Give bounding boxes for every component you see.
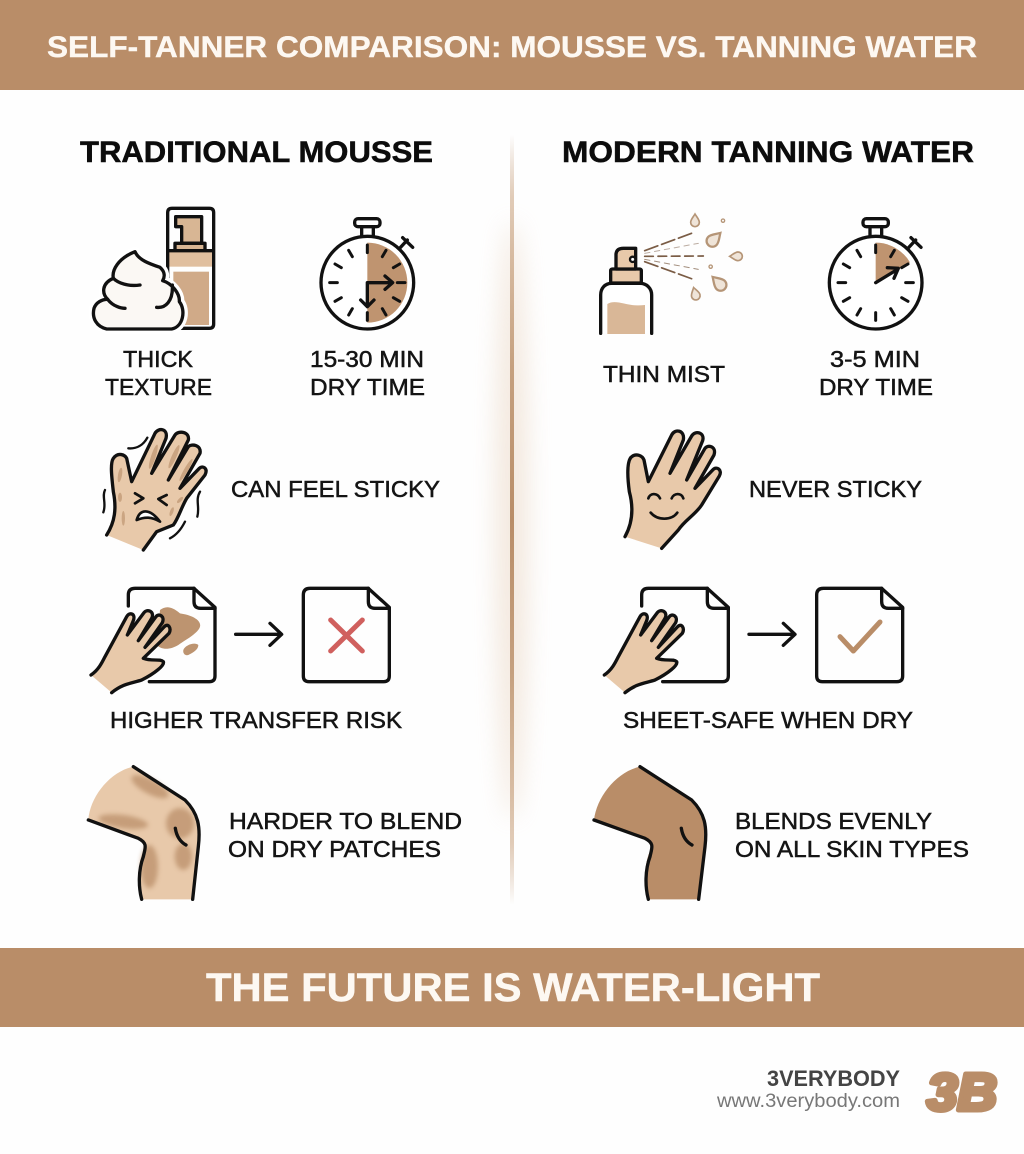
label: harder to blend on dry patches: ON DRY PATCHES bbox=[228, 836, 441, 862]
website: www.3verybody.com bbox=[716, 1091, 900, 1112]
header banner bbox=[0, 0, 1024, 90]
icon: happy hand bbox=[625, 431, 720, 548]
label: dry time 3-5 min bbox=[819, 346, 933, 400]
icon: sheet stays clean with check bbox=[604, 588, 903, 693]
label: never sticky: NEVER STICKY bbox=[749, 476, 922, 502]
label: dry time 15-30 min: 15-30 MIN bbox=[310, 346, 424, 372]
label: thick texture: TEXTURE bbox=[105, 374, 212, 400]
heading: traditional mousse: TRADITIONAL MOUSSE bbox=[80, 136, 433, 169]
label: higher transfer risk: HIGHER TRANSFER RISK bbox=[110, 707, 403, 733]
banner text: THE FUTURE IS WATER-LIGHT bbox=[206, 966, 820, 1010]
bottom banner bbox=[0, 948, 1024, 1027]
label: dry time 3-5 min: 3-5 MIN bbox=[830, 346, 920, 372]
label: thin mist: THIN MIST bbox=[603, 361, 725, 387]
icon: stopwatch 15-30 min bbox=[321, 219, 414, 329]
panel: modern tanning water bbox=[562, 136, 974, 899]
panel: traditional mousse bbox=[80, 136, 462, 899]
logo mark: 3B bbox=[927, 1064, 997, 1122]
icon: knee with even tan bbox=[594, 767, 706, 899]
label: blends evenly on all skin types: ON ALL SKIN TYPES bbox=[735, 836, 969, 862]
label: can feel sticky: CAN FEEL STICKY bbox=[231, 476, 440, 502]
label: harder to blend on dry patches: HARDER TO BLEND bbox=[229, 808, 462, 834]
icon: transfer onto sheet with x bbox=[91, 588, 389, 693]
label: harder to blend on dry patches bbox=[228, 808, 462, 862]
label: dry time 15-30 min: DRY TIME bbox=[310, 374, 425, 400]
heading: modern tanning water: MODERN TANNING WATER bbox=[562, 136, 974, 169]
label: blends evenly on all skin types bbox=[735, 808, 969, 862]
label: dry time 3-5 min: DRY TIME bbox=[819, 374, 933, 400]
label: dry time 15-30 min bbox=[310, 346, 425, 400]
icon: knee with patchy tan bbox=[88, 767, 199, 899]
icon: sticky hand bbox=[103, 430, 206, 550]
label: blends evenly on all skin types: BLENDS EVENLY bbox=[735, 808, 932, 834]
title: SELF-TANNER COMPARISON: MOUSSE VS. TANNING WATER bbox=[47, 31, 977, 64]
label: thick texture: THICK bbox=[123, 346, 194, 372]
label: thick texture bbox=[105, 346, 212, 400]
footer brand bbox=[716, 1064, 997, 1122]
brand name: 3VERYBODY bbox=[767, 1066, 900, 1091]
icon: stopwatch 3-5 min bbox=[829, 219, 922, 329]
label: sheet-safe when dry: SHEET-SAFE WHEN DRY bbox=[623, 707, 913, 733]
icon: spray bottle with mist bbox=[601, 214, 742, 334]
icon: mousse foam and bottle bbox=[93, 208, 214, 329]
center divider bbox=[496, 135, 528, 905]
